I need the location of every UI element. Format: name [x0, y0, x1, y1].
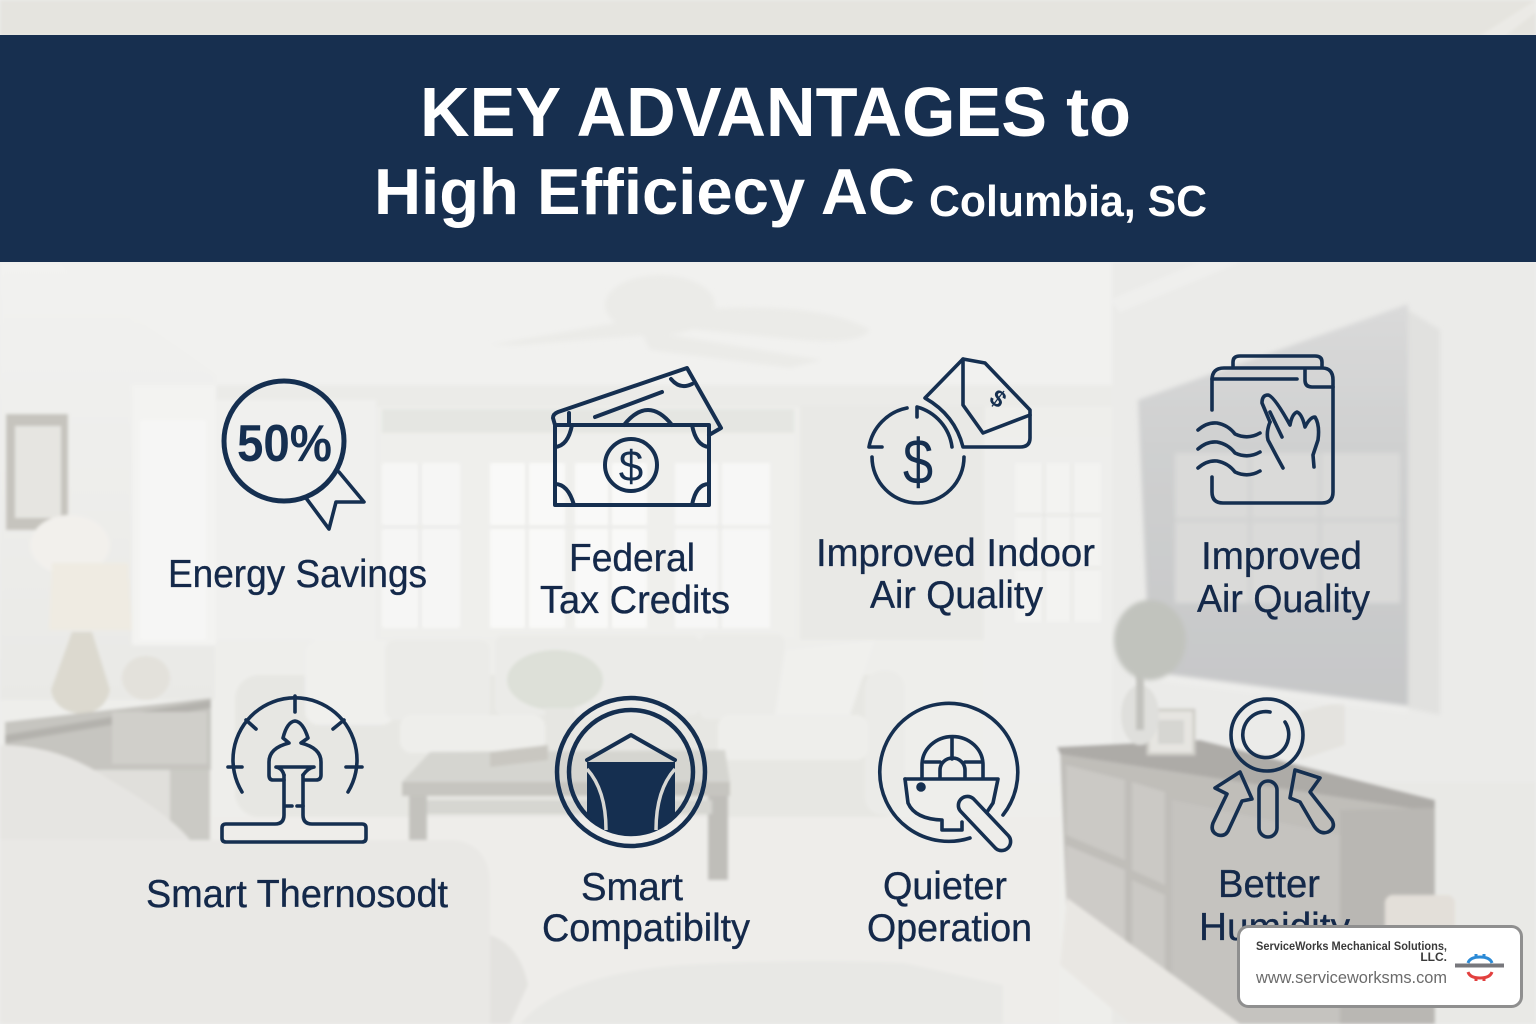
icon: 50% badge: 50% [237, 415, 332, 473]
label: smart thermostat: Smart Thernosodt [146, 873, 448, 916]
ornaments on dresser [1148, 710, 1194, 754]
sofa [235, 675, 905, 817]
icon: 50% badge [224, 381, 364, 529]
label: quieter operation: Operation [867, 907, 1032, 950]
icon: smart compatibility house badge [557, 698, 705, 852]
label: smart compatibility: Compatibilty [542, 907, 750, 950]
right wall [1112, 262, 1536, 782]
label: smart compatibility [542, 866, 750, 950]
valance [382, 409, 794, 433]
label: federal tax credits: Federal [569, 537, 695, 580]
label: better humidity: Humidity [1199, 906, 1350, 949]
icon: money bills: $ [619, 442, 643, 491]
company name: ServiceWorks Mechanical Solutions, [1256, 939, 1447, 953]
icon: humidity circle and arrows [1212, 699, 1333, 837]
icon: money bills [553, 368, 721, 505]
ceiling fan [490, 275, 870, 368]
label: improved indoor air quality [816, 532, 1095, 617]
company name: LLC. [1420, 950, 1447, 964]
label: quieter operation: Quieter [883, 865, 1007, 908]
title line 2: High Efficiecy AC [374, 155, 915, 228]
dresser [1060, 750, 1435, 1024]
plant on table [507, 650, 603, 710]
label: federal tax credits: Tax Credits [540, 579, 730, 622]
label: improved indoor air quality: Improved Indoor [816, 532, 1095, 575]
armchair [0, 745, 190, 840]
coffee table [402, 750, 730, 782]
label: improved indoor air quality: Air Quality [870, 574, 1043, 617]
ceiling [0, 262, 1120, 387]
company card [1238, 926, 1522, 1006]
lamp [30, 515, 110, 575]
icon: coin and envelope: $ [984, 384, 1012, 414]
label: improved air quality [1197, 535, 1370, 621]
label: improved air quality: Air Quality [1197, 578, 1370, 621]
foreground sofa [0, 840, 490, 1024]
main windows [380, 433, 795, 638]
icon: smart thermostat figure [222, 696, 366, 842]
left window and curtains [132, 385, 216, 645]
label: better humidity: Better [1218, 863, 1320, 906]
tv on wall [1114, 304, 1440, 715]
icon: coin and envelope: $ [903, 426, 933, 498]
icon: document with air waves and hand [1198, 356, 1333, 503]
door [984, 438, 1111, 782]
picture [6, 414, 68, 530]
title location: Columbia, SC [929, 177, 1207, 226]
floor [0, 816, 1060, 1024]
company name [1256, 939, 1447, 964]
title line 1: KEY ADVANTAGES to [420, 73, 1131, 151]
side table [5, 698, 211, 770]
back wall band [215, 385, 1115, 407]
title banner [0, 35, 1536, 262]
website: www.serviceworksms.com [1255, 968, 1447, 987]
icon: quieter operation magnifier [880, 703, 1018, 851]
label: quieter operation [867, 865, 1032, 950]
label: smart compatibility: Smart [581, 866, 683, 909]
icon: coin and envelope [869, 359, 1030, 503]
label: federal tax credits [540, 537, 730, 622]
icon: company logo [1455, 954, 1504, 981]
label: improved air quality: Improved [1201, 535, 1362, 578]
label: better humidity [1199, 863, 1350, 949]
label: energy savings: Energy Savings [168, 553, 427, 596]
